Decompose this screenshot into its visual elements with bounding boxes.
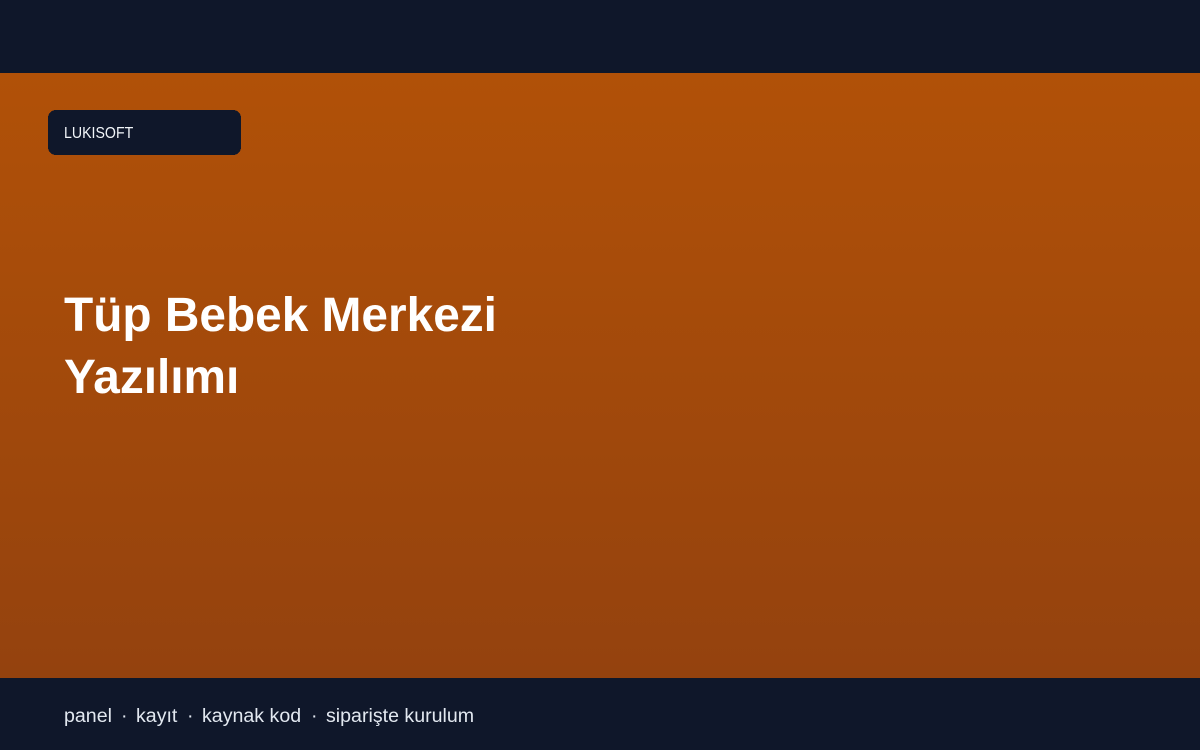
footer feature list: · [311,705,318,727]
footer feature list: panel [64,705,112,727]
footer band [0,678,1200,750]
footer feature list: kayıt [136,705,177,727]
footer feature list: · [121,705,128,727]
footer feature list: kaynak kod [202,705,301,727]
title: Yazılımı [64,351,239,404]
badge: LUKISOFT: LUKISOFT [64,125,133,142]
title: Tüp Bebek Merkezi [64,289,497,342]
footer feature list: siparişte kurulum [326,705,474,727]
top band [0,0,1200,73]
badge: LUKISOFT [48,110,241,155]
footer feature list: · [187,705,194,727]
title [64,289,497,404]
footer feature list [64,705,474,727]
